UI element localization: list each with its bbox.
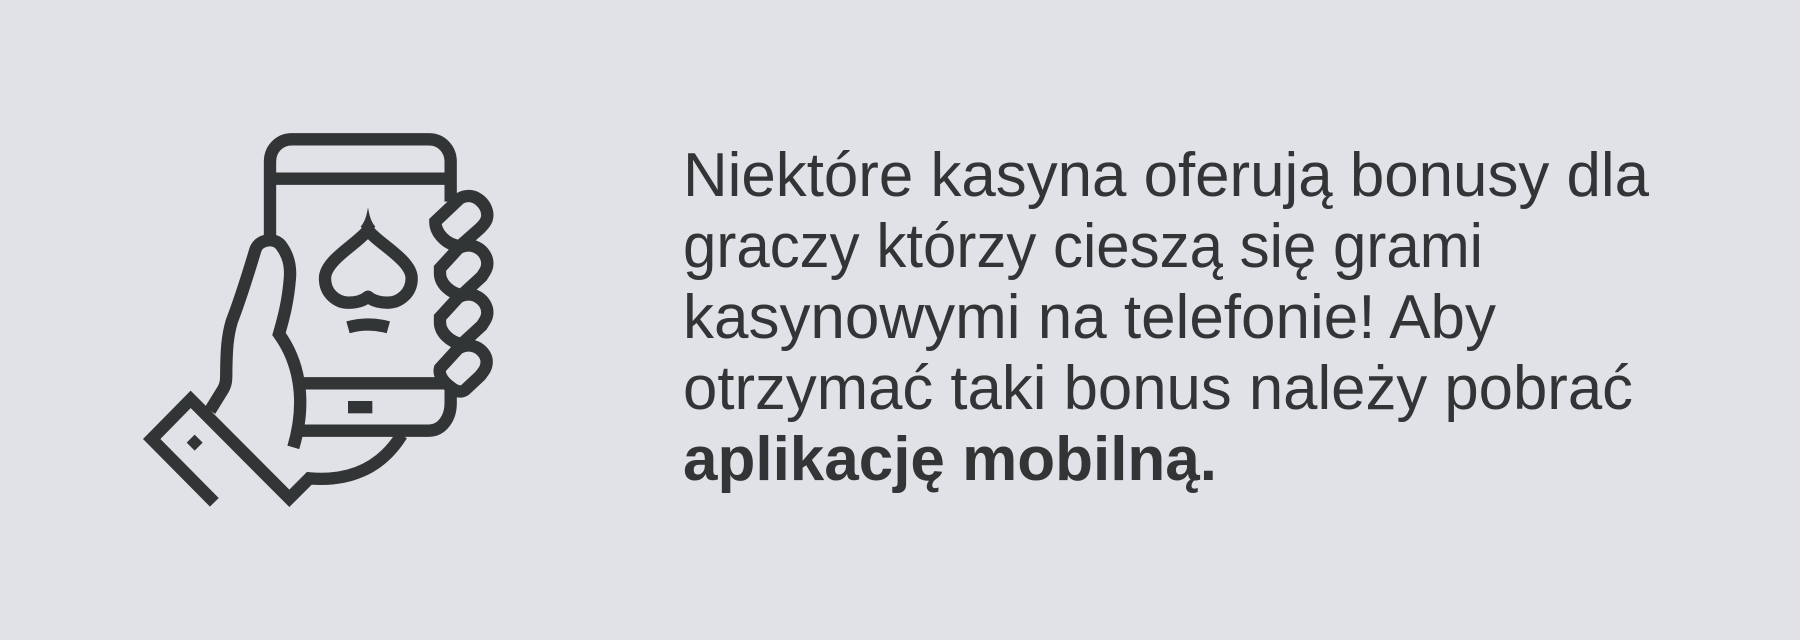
text block: graczy którzy cieszą się grami [683, 212, 1483, 281]
icon: hand holding phone with spade [152, 139, 487, 502]
hand and cuff [152, 240, 402, 502]
text block: aplikację mobilną. [683, 425, 1217, 494]
text block: otrzymać taki bonus należy pobrać [683, 354, 1633, 423]
text block [683, 141, 1650, 494]
text block: kasynowymi na telefonie! Aby [683, 283, 1496, 352]
text block: Niektóre kasyna oferują bonusy dla [683, 141, 1650, 210]
phone body [270, 139, 451, 431]
fingers [435, 196, 487, 392]
spade symbol [325, 207, 412, 327]
